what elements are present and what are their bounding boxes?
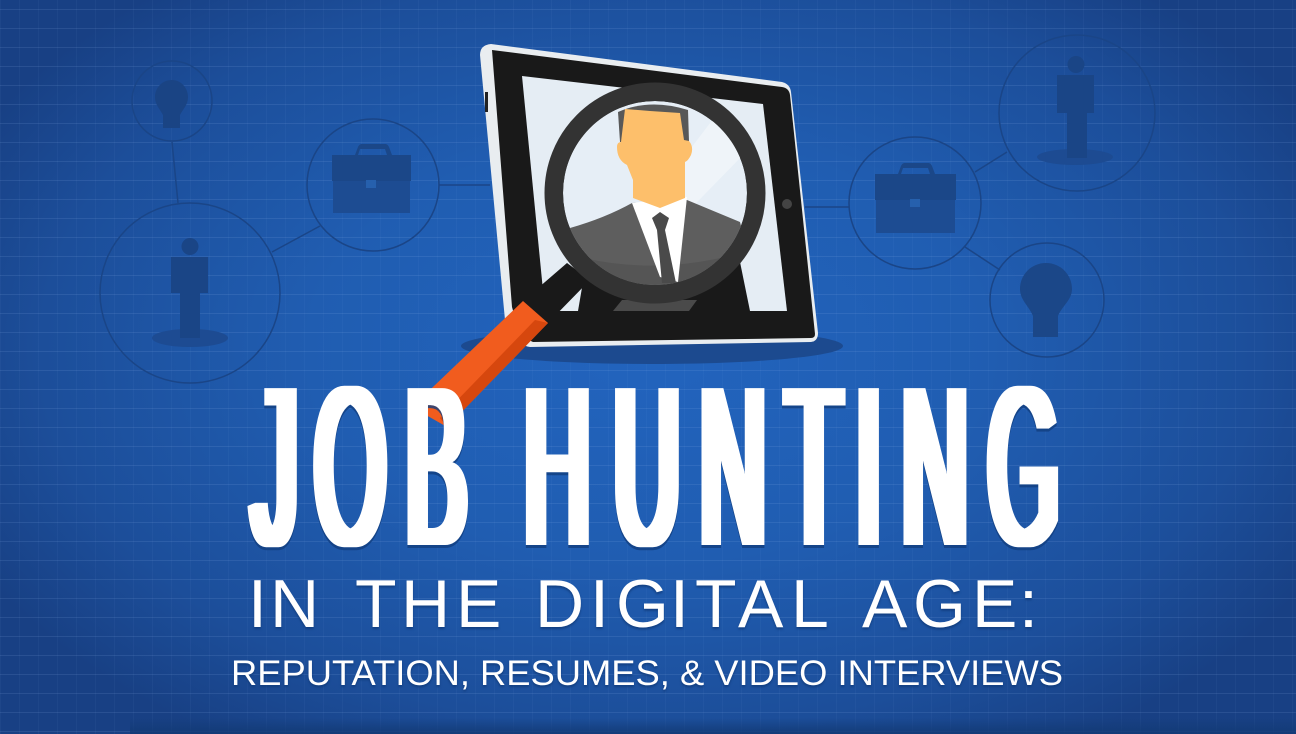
face — [617, 109, 692, 208]
title — [252, 339, 1059, 594]
icon: person left — [171, 238, 208, 338]
network diagram: left — [100, 61, 490, 383]
circle: person right — [999, 35, 1155, 191]
tablet frame — [480, 44, 818, 347]
circle: briefcase left — [307, 119, 439, 251]
icon: lightbulb right — [1020, 263, 1072, 337]
circle: lightbulb right — [990, 243, 1104, 357]
circle: person left — [100, 203, 280, 383]
orange handle — [412, 301, 548, 427]
icon: briefcase right — [875, 163, 956, 233]
camera — [782, 199, 792, 209]
title: HUNTING — [524, 339, 1059, 594]
magnifying glass — [412, 92, 760, 427]
hair — [618, 104, 689, 142]
tablet bezel — [492, 50, 815, 342]
handle connector — [523, 263, 590, 323]
person's dark body on screen — [578, 263, 750, 311]
subheading: reputation, resumes, video interviews: REPUTATION, RESUMES, & VIDEO INTERVIEWS — [231, 654, 1063, 693]
tablet — [480, 44, 818, 347]
subtitle: in the digital age: IN THE DIGITAL AGE: — [248, 566, 1038, 642]
lens ring — [554, 92, 756, 294]
icon: briefcase left — [332, 144, 411, 213]
icon: person right — [1057, 56, 1094, 158]
lens content: businessman — [563, 101, 747, 285]
tie — [652, 212, 676, 283]
title: JOB — [252, 339, 467, 594]
circle: briefcase right — [849, 137, 981, 269]
network diagram: right — [805, 35, 1155, 357]
suit — [570, 200, 741, 285]
shirt shadow below lens — [613, 300, 697, 311]
icon: lightbulb left — [155, 80, 188, 128]
side button — [485, 92, 488, 112]
shirt — [632, 197, 687, 282]
tablet screen — [522, 76, 787, 311]
circle: lightbulb left — [132, 61, 212, 141]
tablet shadow — [461, 328, 843, 364]
